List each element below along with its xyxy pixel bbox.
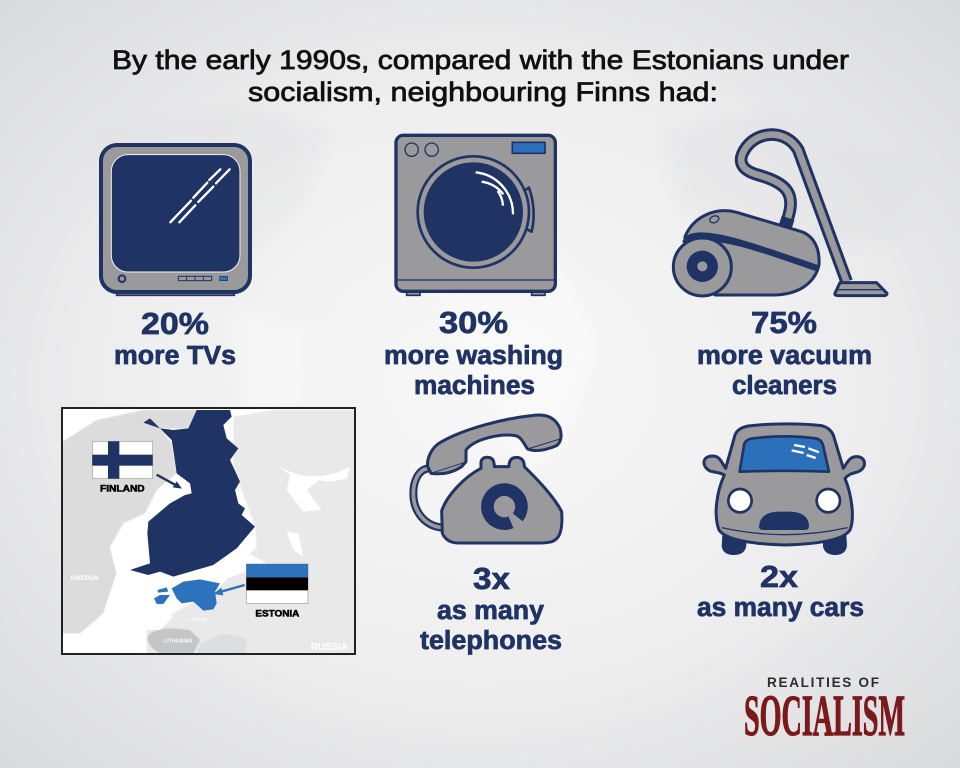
label: 75% more vacuum cleaners: 75% [751, 305, 817, 340]
map: Finland [130, 410, 255, 577]
label: Estonia: ESTONIA [255, 609, 300, 619]
icon: telephone [413, 415, 562, 543]
map: Estonia [154, 579, 220, 611]
title [112, 45, 849, 107]
label: 75% more vacuum cleaners: more vacuum [697, 342, 872, 370]
title: socialism, neighbouring Finns had: [248, 77, 718, 107]
label: 75% more vacuum cleaners [697, 305, 872, 400]
arrow: Finland [157, 475, 182, 489]
icon: television [101, 145, 250, 295]
label: Lithuania: LITHUANIA [164, 638, 193, 644]
flag: Estonia [246, 564, 308, 603]
flag: Finland [92, 441, 153, 479]
logo: Realities of Socialism: REALITIES OF [767, 675, 879, 690]
label: 30% more washing machines: more washing [384, 342, 563, 370]
label: Sweden: SWEDEN [70, 575, 99, 582]
panel: cars [697, 424, 864, 622]
icon: car [704, 424, 864, 555]
label: 20% more TVs: more TVs [114, 342, 236, 370]
label: Latvia: LATVIA [188, 617, 207, 622]
title: By the early 1990s, compared with the Estonians under [112, 45, 849, 75]
label: 3x as many telephones: as many [437, 597, 545, 625]
label: 2x as many cars: 2x [760, 559, 799, 594]
label: 2x as many cars: as many cars [697, 594, 864, 622]
label: 2x as many cars [697, 559, 864, 622]
panel: TVs [101, 145, 250, 370]
label: Russia: RUSSIA [311, 642, 348, 653]
label: 20% more TVs [114, 306, 236, 370]
icon: vacuum cleaner [673, 135, 887, 296]
panel: washing machines [384, 135, 563, 400]
label: 3x as many telephones: 3x [473, 561, 511, 596]
panel: map of Finland and Estonia [60, 408, 355, 654]
logo: Realities of Socialism [744, 675, 905, 748]
panel: telephones [413, 415, 562, 655]
map: neighbouring land [60, 410, 355, 653]
label: 30% more washing machines: 30% [439, 305, 508, 340]
label: 3x as many telephones: telephones [420, 627, 562, 655]
panel: vacuum cleaners [673, 135, 887, 400]
icon: washing machine [396, 135, 555, 295]
label: 75% more vacuum cleaners: cleaners [732, 372, 837, 400]
label: 30% more washing machines: machines [414, 372, 535, 400]
label: 20% more TVs: 20% [141, 306, 209, 341]
label: 30% more washing machines [384, 305, 563, 400]
label: Finland: FINLAND [100, 483, 145, 493]
label: 3x as many telephones [420, 561, 562, 655]
arrow: Estonia [213, 585, 245, 595]
